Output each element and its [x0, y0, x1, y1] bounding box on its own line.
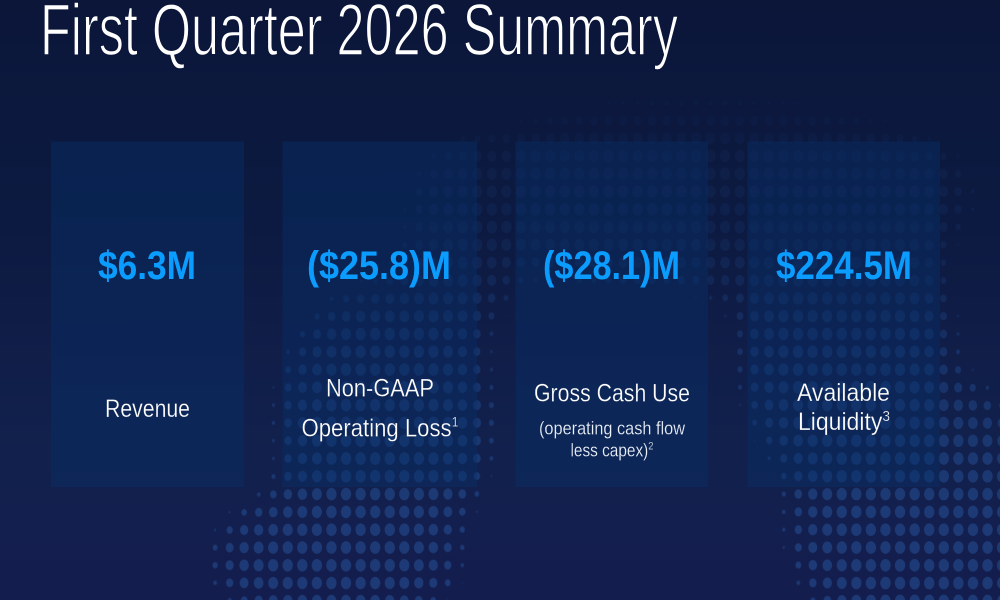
- label: gross cash use: Gross Cash Use: [534, 380, 690, 408]
- note: less capex: 2: [648, 440, 654, 452]
- value: operating loss: ($25.8)M: [307, 244, 451, 288]
- note: less capex: less capex): [570, 440, 662, 460]
- panel: revenue: [51, 142, 244, 487]
- note: operating cash flow: (operating cash flow: [539, 418, 686, 438]
- value: liquidity: $224.5M: [776, 244, 912, 288]
- halftone dot world pattern: [212, 157, 1000, 600]
- label: operating loss: Operating Loss: [302, 414, 471, 442]
- panel: non-GAAP operating loss: [282, 142, 477, 487]
- panel: gross cash use: [516, 142, 708, 487]
- label: available: Available: [797, 379, 890, 407]
- label: liquidity: 3: [882, 408, 890, 425]
- value: gross cash use: ($28.1)M: [543, 244, 680, 288]
- label: liquidity: Liquidity: [798, 408, 890, 436]
- label: non-GAAP: Non-GAAP: [326, 374, 434, 402]
- panel: available liquidity: [748, 142, 940, 487]
- label: revenue: Revenue: [105, 395, 190, 423]
- label: operating loss: 1: [452, 414, 459, 430]
- value: revenue: $6.3M: [98, 244, 196, 288]
